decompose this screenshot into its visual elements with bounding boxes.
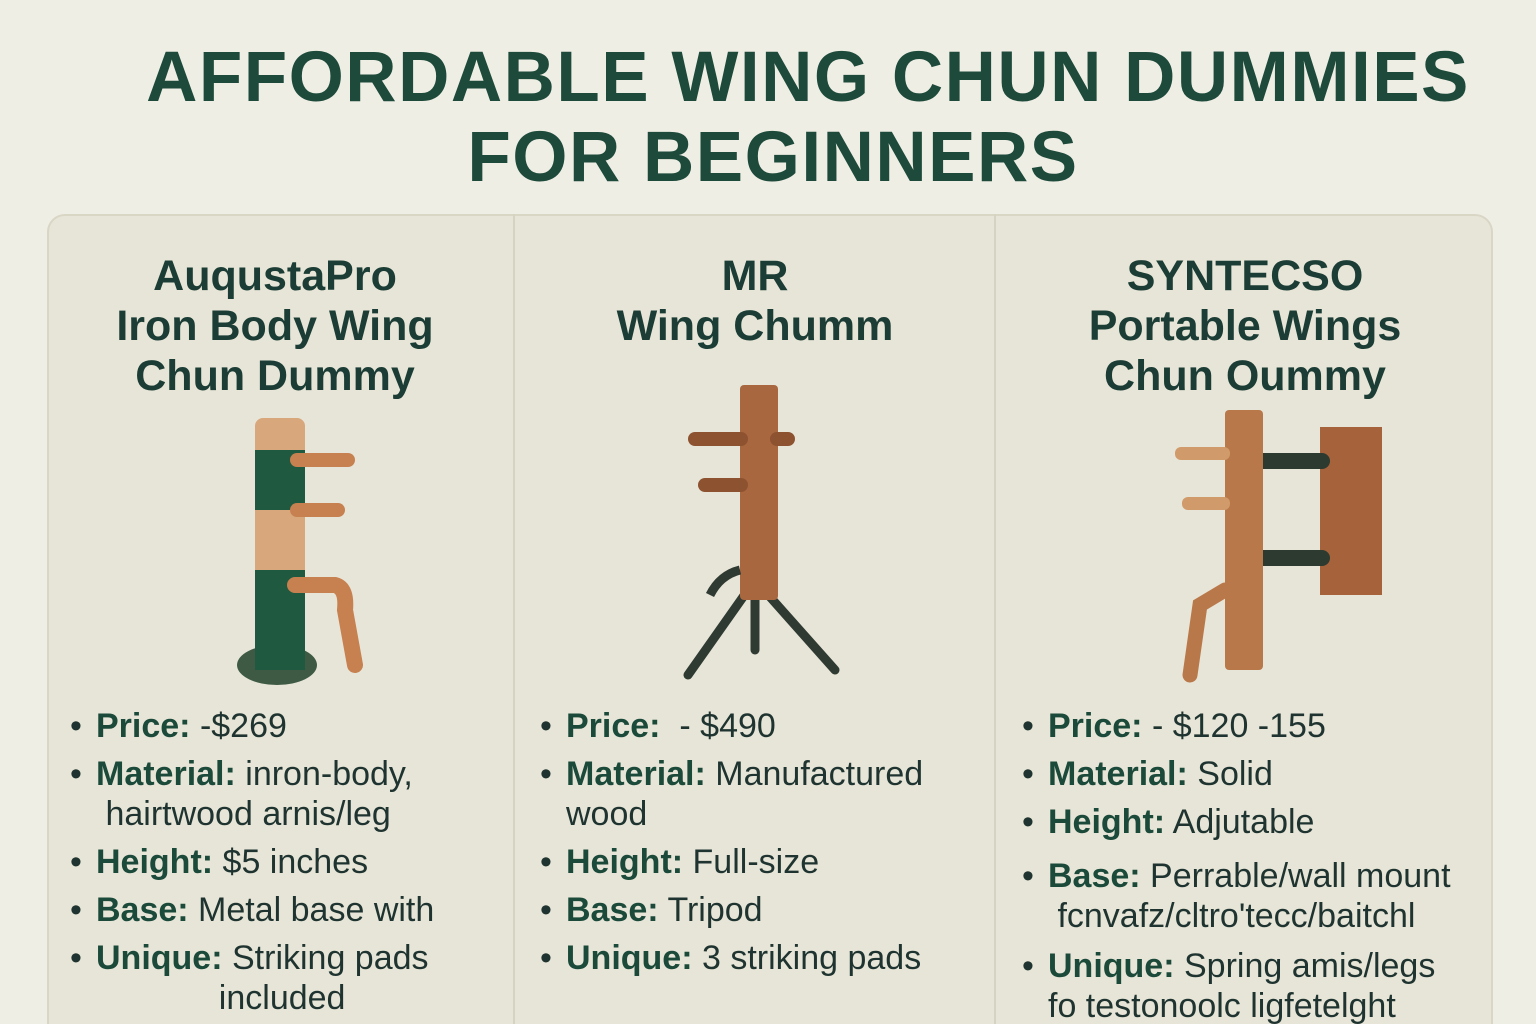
title: [146, 38, 1470, 197]
bullets: col 2: [541, 707, 923, 977]
bullets: col 3: Height: Adjutable: [1048, 803, 1314, 841]
bullets: col 3: Price: - $120 -155: [1048, 707, 1326, 745]
bullets: col 1: hairtwood arnis/leg: [105, 795, 391, 833]
title: FOR BEGINNERS: [467, 118, 1079, 197]
bullets: col 3: fo testonoolc ligfetelght: [1048, 987, 1396, 1024]
heading: SYNTECSO: Chun Oummy: [1104, 352, 1386, 400]
heading: MR: [616, 252, 893, 350]
heading: SYNTECSO: SYNTECSO: [1127, 252, 1363, 300]
bullets: col 1: Height: $5 inches: [96, 843, 368, 881]
bullets: col 2: Unique: 3 striking pads: [566, 939, 921, 977]
panel: products: [47, 214, 1493, 1024]
icon: dummy 3: [1175, 410, 1382, 682]
bullets: col 1: Material: inron-body,: [96, 755, 413, 793]
bullets: col 3: Base: Perrable/wall mount: [1048, 857, 1451, 895]
heading: AuqustaPro: Iron Body Wing: [116, 302, 434, 350]
heading: SYNTECSO: [1089, 252, 1401, 400]
icon: dummy 1: [237, 418, 363, 685]
bullets: col 2: Base: Tripod: [566, 891, 763, 929]
bullets: col 1: [71, 707, 434, 1017]
bullets: col 3: fcnvafz/cltro'tecc/baitchl: [1057, 897, 1415, 935]
icon: dummy 2: [684, 385, 840, 680]
heading: MR: MR: [722, 252, 788, 300]
heading: AuqustaPro: Chun Dummy: [135, 352, 415, 400]
title: AFFORDABLE WING CHUN DUMMIES: [146, 38, 1470, 117]
bullets: col 2: Material: Manufactured: [566, 755, 923, 793]
bullets: col 2: wood: [566, 795, 647, 833]
heading: MR: Wing Chumm: [617, 302, 893, 350]
bullets: col 1: Unique: Striking pads: [96, 939, 429, 977]
heading: AuqustaPro: [116, 252, 434, 400]
bullets: col 2: Price: - $490: [566, 707, 776, 745]
bullets: col 1: included: [219, 979, 345, 1017]
bullets: col 1: Price: -$269: [96, 707, 287, 745]
heading: SYNTECSO: Portable Wings: [1089, 302, 1401, 350]
heading: AuqustaPro: AuqustaPro: [153, 252, 397, 300]
bullets: col 3: [1023, 707, 1451, 1024]
bullets: col 3: Material: Solid: [1048, 755, 1273, 793]
bullets: col 2: Height: Full-size: [566, 843, 819, 881]
bullets: col 3: Unique: Spring amis/legs: [1048, 947, 1435, 985]
bullets: col 1: Base: Metal base with: [96, 891, 434, 929]
